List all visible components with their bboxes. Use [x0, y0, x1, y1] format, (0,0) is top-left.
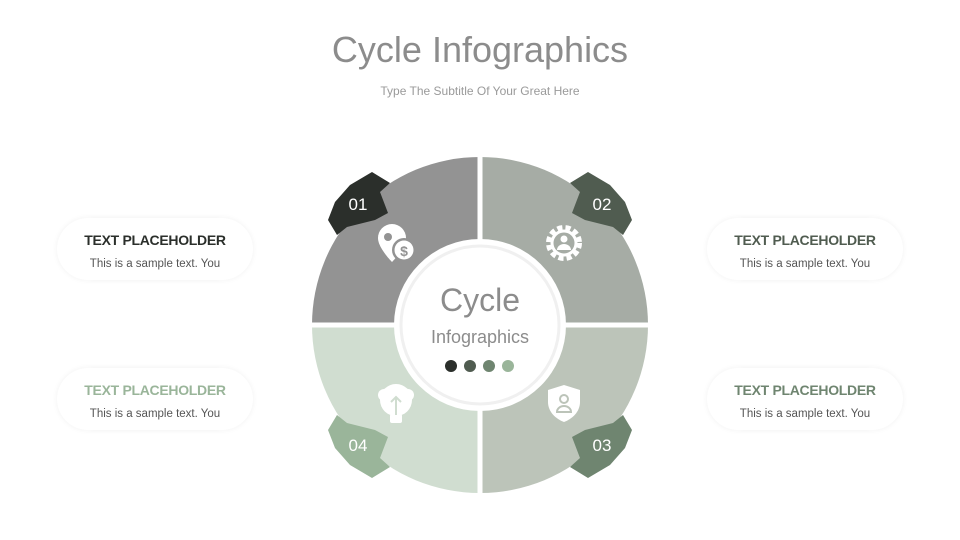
text box 03 [707, 368, 903, 430]
icon: location dollar [378, 224, 416, 262]
text box 04: This is a sample text. You [90, 408, 220, 420]
center circle [394, 239, 566, 411]
tab 03 [570, 415, 632, 478]
text box 03: This is a sample text. You [740, 408, 870, 420]
text box 02: This is a sample text. You [740, 258, 870, 270]
text box 04 [57, 368, 253, 430]
quadrant 1 [312, 157, 480, 325]
quadrant 2 [480, 157, 648, 325]
icon: location dollar: $ [400, 243, 408, 259]
text box 01 [57, 218, 253, 280]
text box 04: TEXT PLACEHOLDER [84, 382, 226, 398]
text box 02: TEXT PLACEHOLDER [734, 232, 876, 248]
title: Cycle Infographics [332, 29, 628, 70]
center circle: Infographics [431, 327, 529, 347]
tab 04 [328, 415, 390, 478]
tab 01: 01 [349, 195, 367, 214]
tab 02: 02 [593, 195, 611, 214]
text box 01: TEXT PLACEHOLDER [84, 232, 226, 248]
icon: brain bulb [378, 384, 414, 423]
quadrant 3 [480, 325, 648, 493]
tab 03: 03 [593, 436, 611, 455]
tab 02 [570, 172, 632, 235]
icon: shield user [548, 385, 580, 422]
text box 01: This is a sample text. You [90, 258, 220, 270]
tab 01 [328, 172, 390, 235]
text box 02 [707, 218, 903, 280]
quadrant 4 [312, 325, 480, 493]
tab 04: 04 [349, 436, 367, 455]
icon: gear user [549, 228, 579, 258]
center circle: Cycle [440, 282, 520, 318]
subtitle: Type The Subtitle Of Your Great Here [380, 84, 580, 98]
text box 03: TEXT PLACEHOLDER [734, 382, 876, 398]
